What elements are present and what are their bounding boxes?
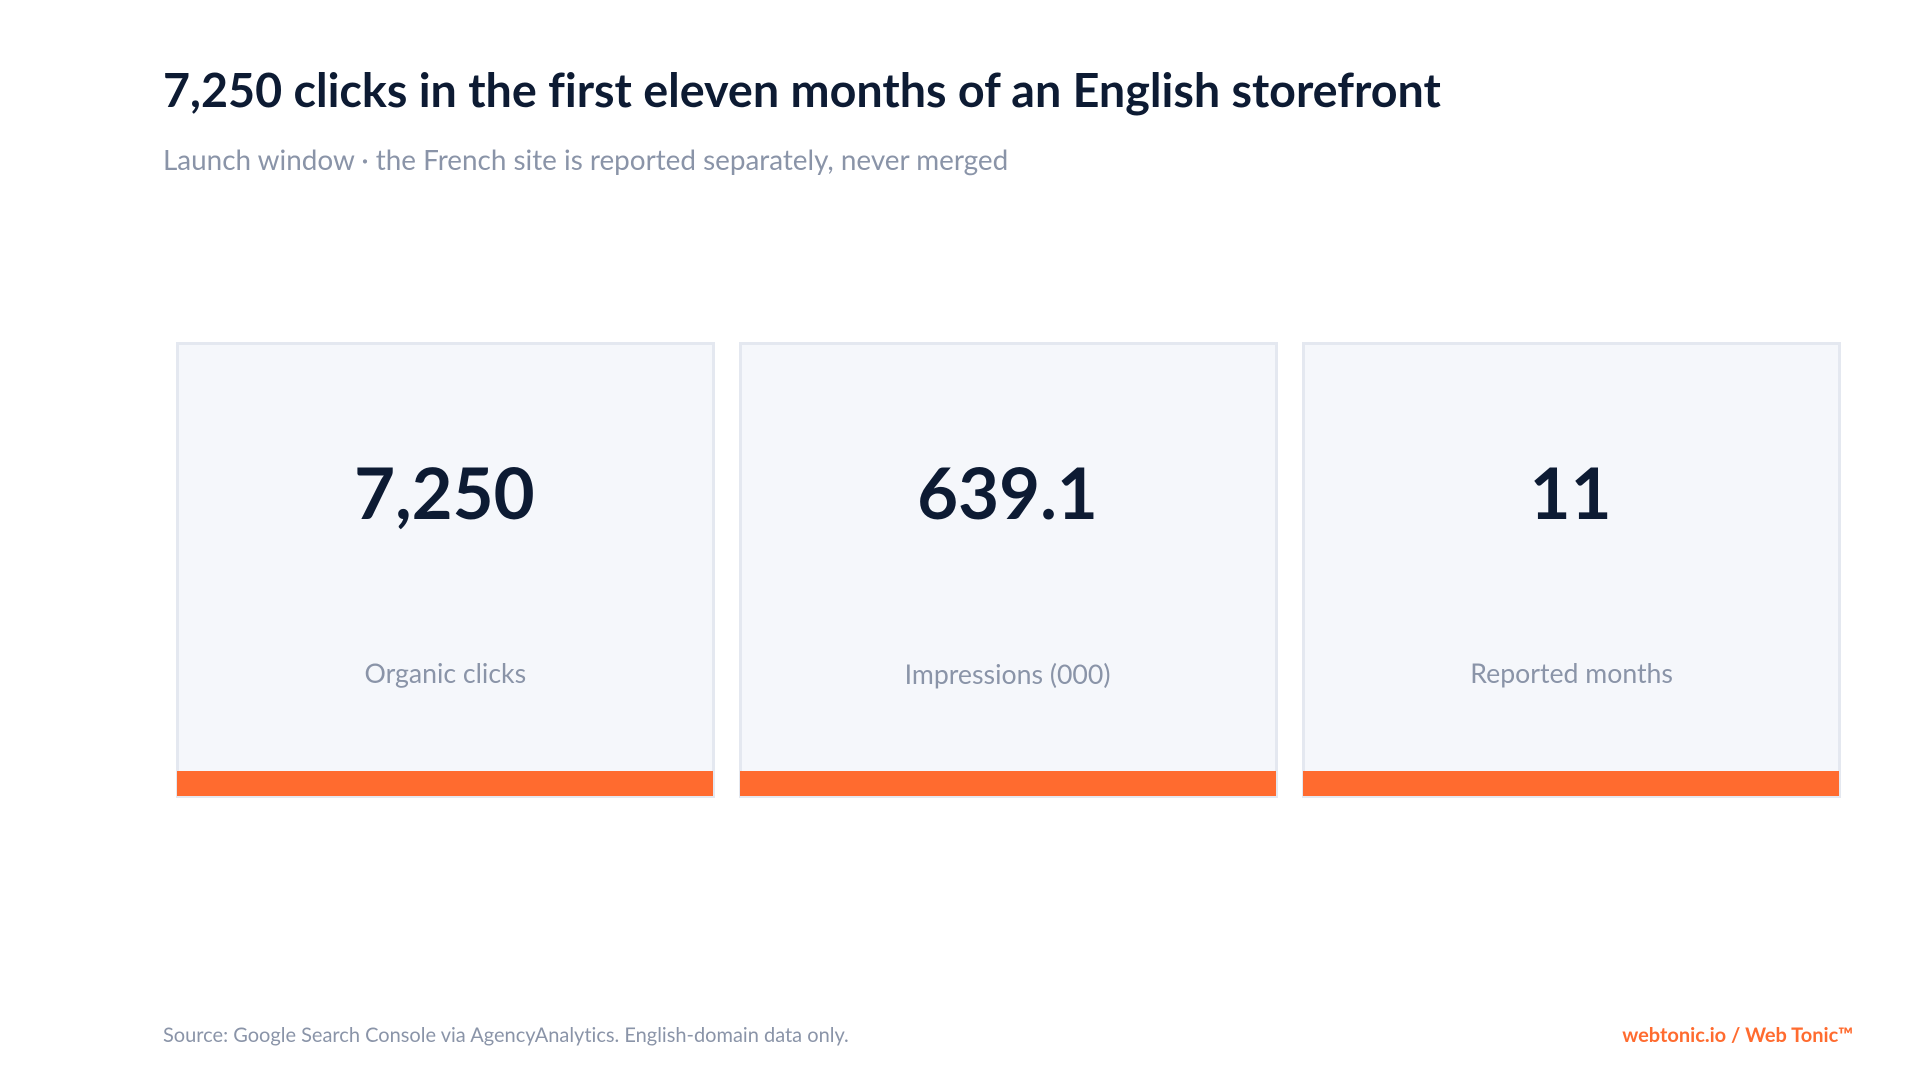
panel: reported months [1302, 342, 1841, 798]
subtitle: Launch window · the French site is reported separately, never merged [163, 142, 1008, 176]
brand credit: webtonic.io / Web Tonic™ [1622, 1023, 1853, 1047]
label: impressions: Impressions (000) [905, 658, 1110, 690]
value: reported months: 11 [1530, 450, 1612, 535]
accent bar: reported months [1303, 771, 1839, 796]
label: reported months: Reported months [1470, 657, 1673, 689]
value: organic clicks: 7,250 [354, 450, 535, 535]
accent bar: impressions [740, 771, 1276, 796]
label: organic clicks: Organic clicks [365, 657, 526, 689]
source note: Source: Google Search Console via AgencyAnalytics. English-domain data only. [163, 1023, 849, 1047]
value: impressions: 639.1 [917, 450, 1098, 535]
title: 7,250 clicks in the first eleven months of an English storefront [163, 61, 1441, 117]
panel: organic clicks [176, 342, 715, 798]
accent bar: organic clicks [177, 771, 713, 796]
panel: impressions [739, 342, 1278, 798]
